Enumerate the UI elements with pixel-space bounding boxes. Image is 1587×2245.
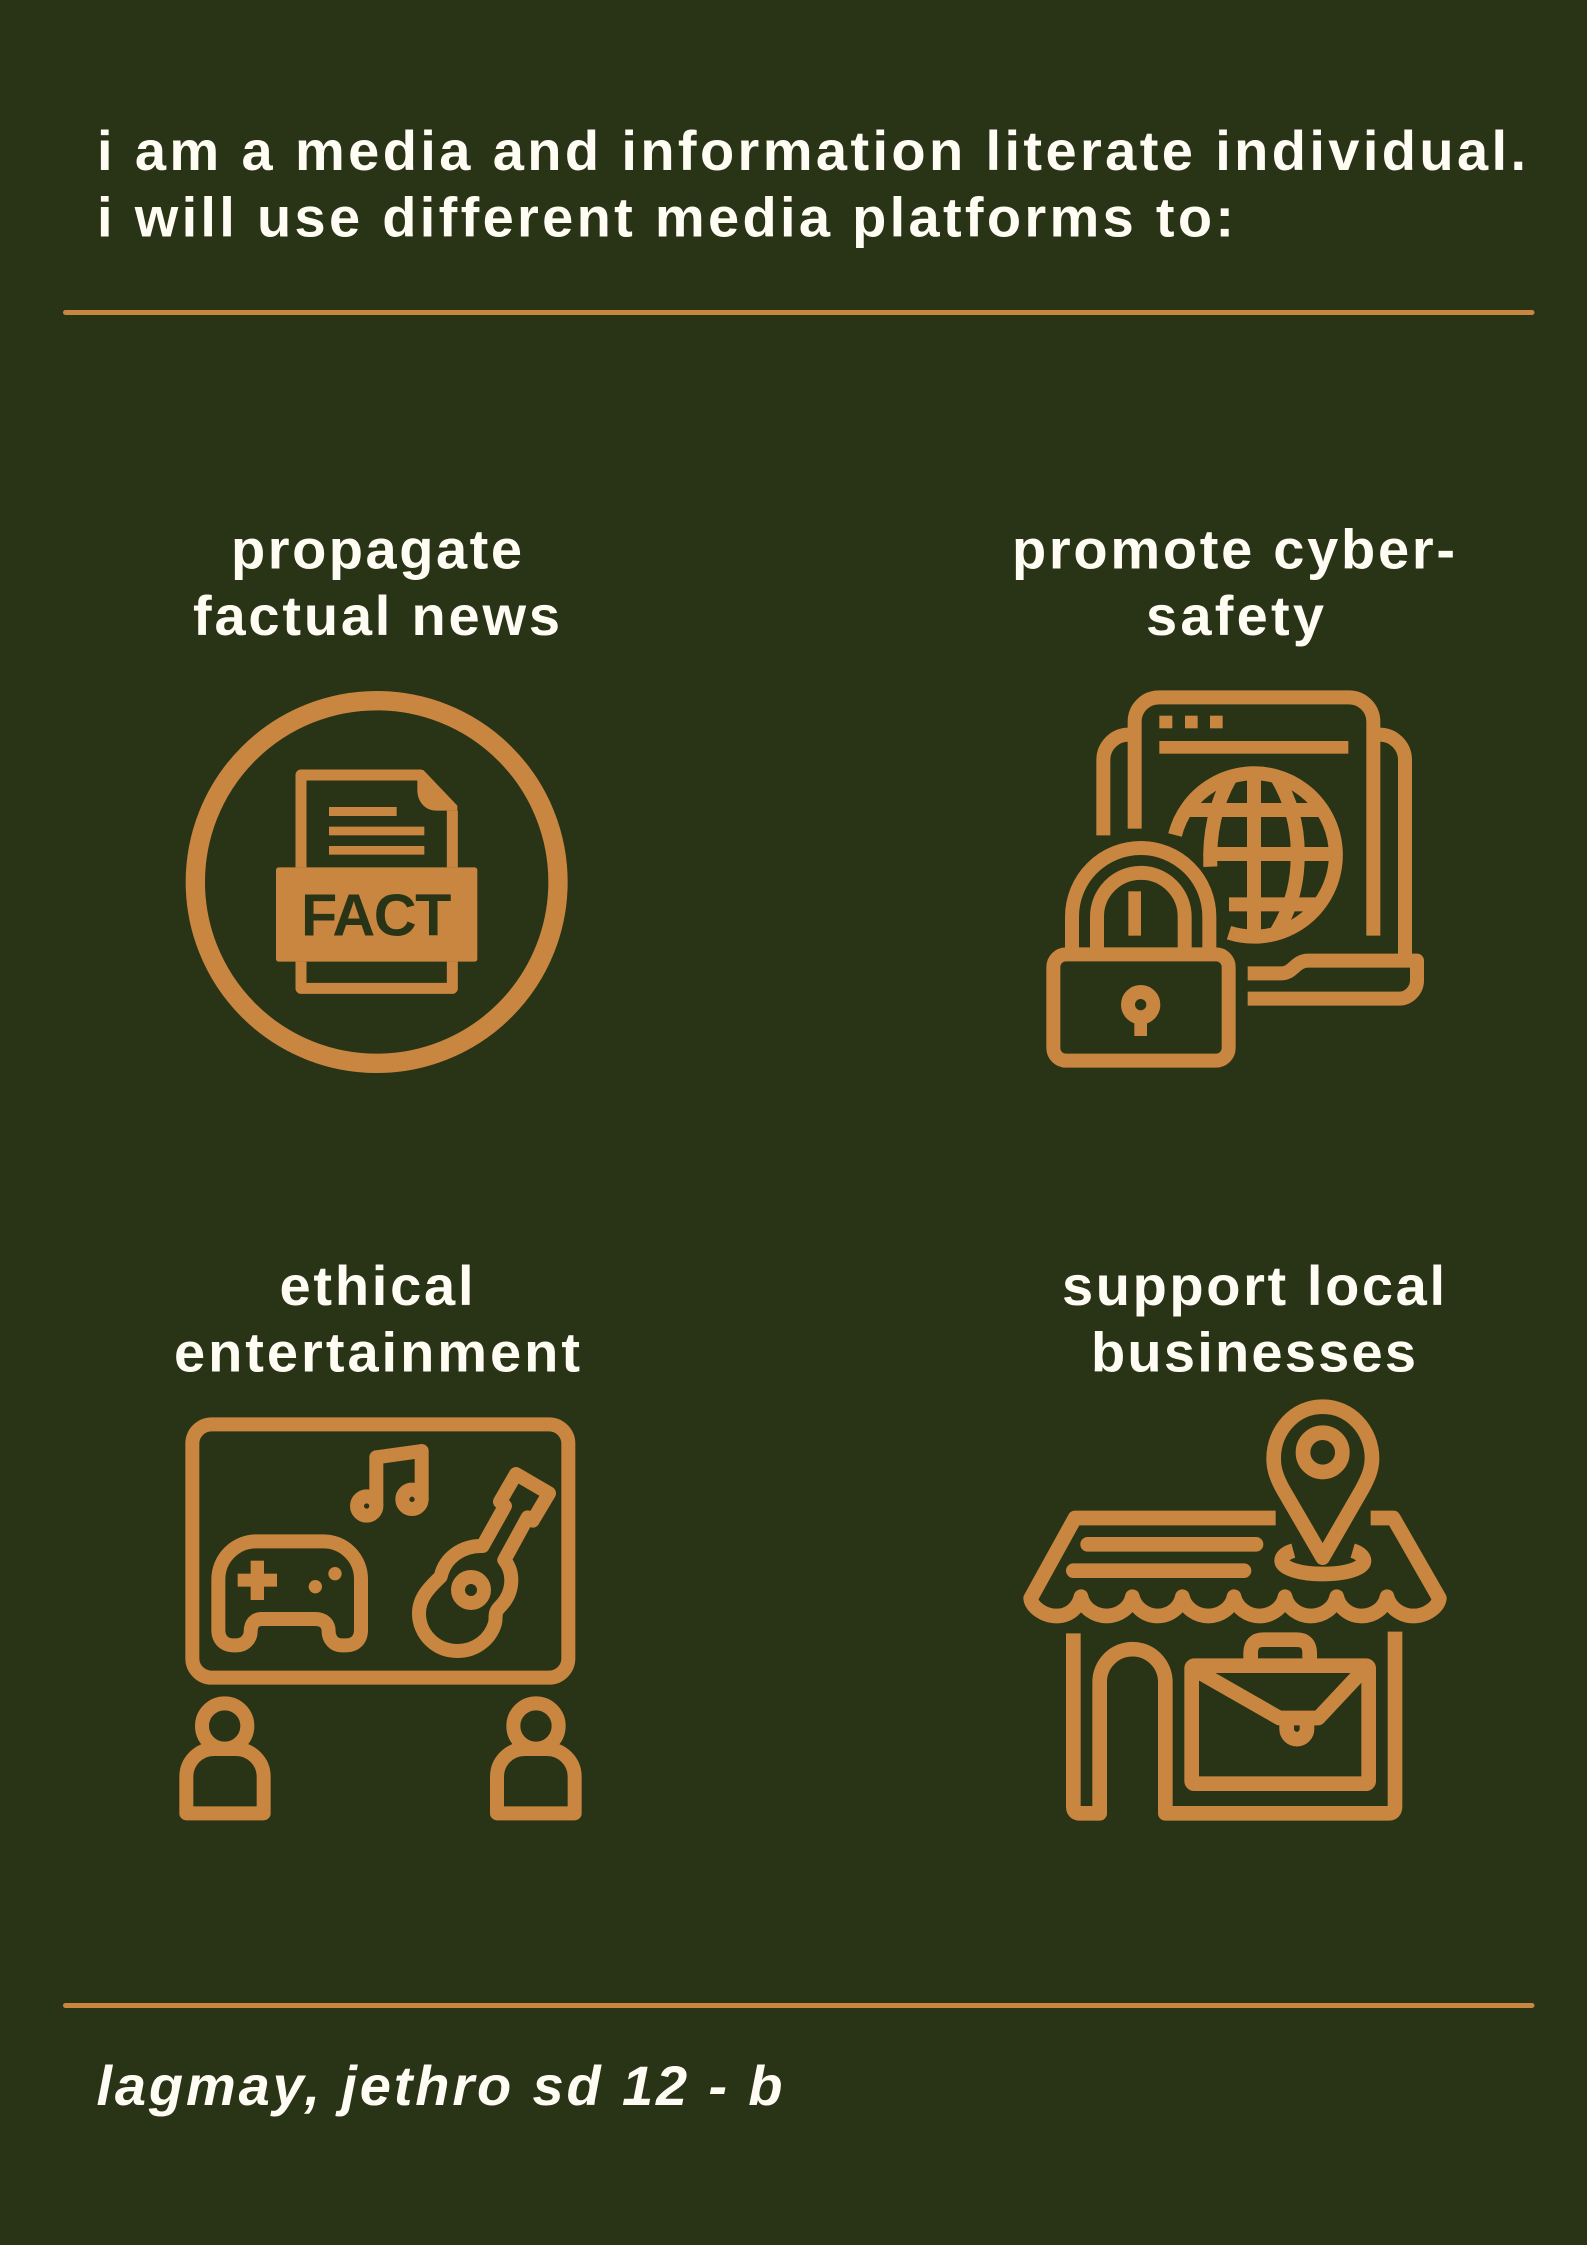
title: i will use different media platforms to: bbox=[97, 186, 1234, 249]
heading: propagate factual news bbox=[193, 517, 560, 647]
icon: shop with location pin and briefcase bbox=[1031, 1407, 1439, 1813]
title: i am a media and information literate individual. bbox=[97, 119, 1526, 182]
heading: promote cyber-safety bbox=[1012, 517, 1455, 647]
icon: fact document in circle: FACT bbox=[301, 882, 451, 949]
heading: promote cyber-safety: promote cyber- bbox=[1012, 517, 1455, 580]
footer: author credit: lagmay, jethro sd 12 - b bbox=[96, 2054, 782, 2117]
heading: ethical entertainment: ethical bbox=[280, 1254, 474, 1317]
title bbox=[97, 119, 1526, 249]
icon: screen with controller, music and guitar, two viewers bbox=[186, 1424, 575, 1813]
heading: support local businesses: support local bbox=[1062, 1254, 1445, 1317]
heading: propagate factual news: factual news bbox=[193, 584, 560, 647]
icon: fact document in circle bbox=[195, 701, 558, 1063]
heading: support local businesses bbox=[1062, 1254, 1445, 1384]
heading: propagate factual news: propagate bbox=[231, 517, 522, 580]
heading: support local businesses: businesses bbox=[1091, 1321, 1416, 1384]
icon: laptop, globe and padlock bbox=[1053, 697, 1417, 1061]
heading: ethical entertainment bbox=[174, 1254, 580, 1384]
heading: promote cyber-safety: safety bbox=[1146, 584, 1324, 647]
heading: ethical entertainment: entertainment bbox=[174, 1321, 580, 1384]
